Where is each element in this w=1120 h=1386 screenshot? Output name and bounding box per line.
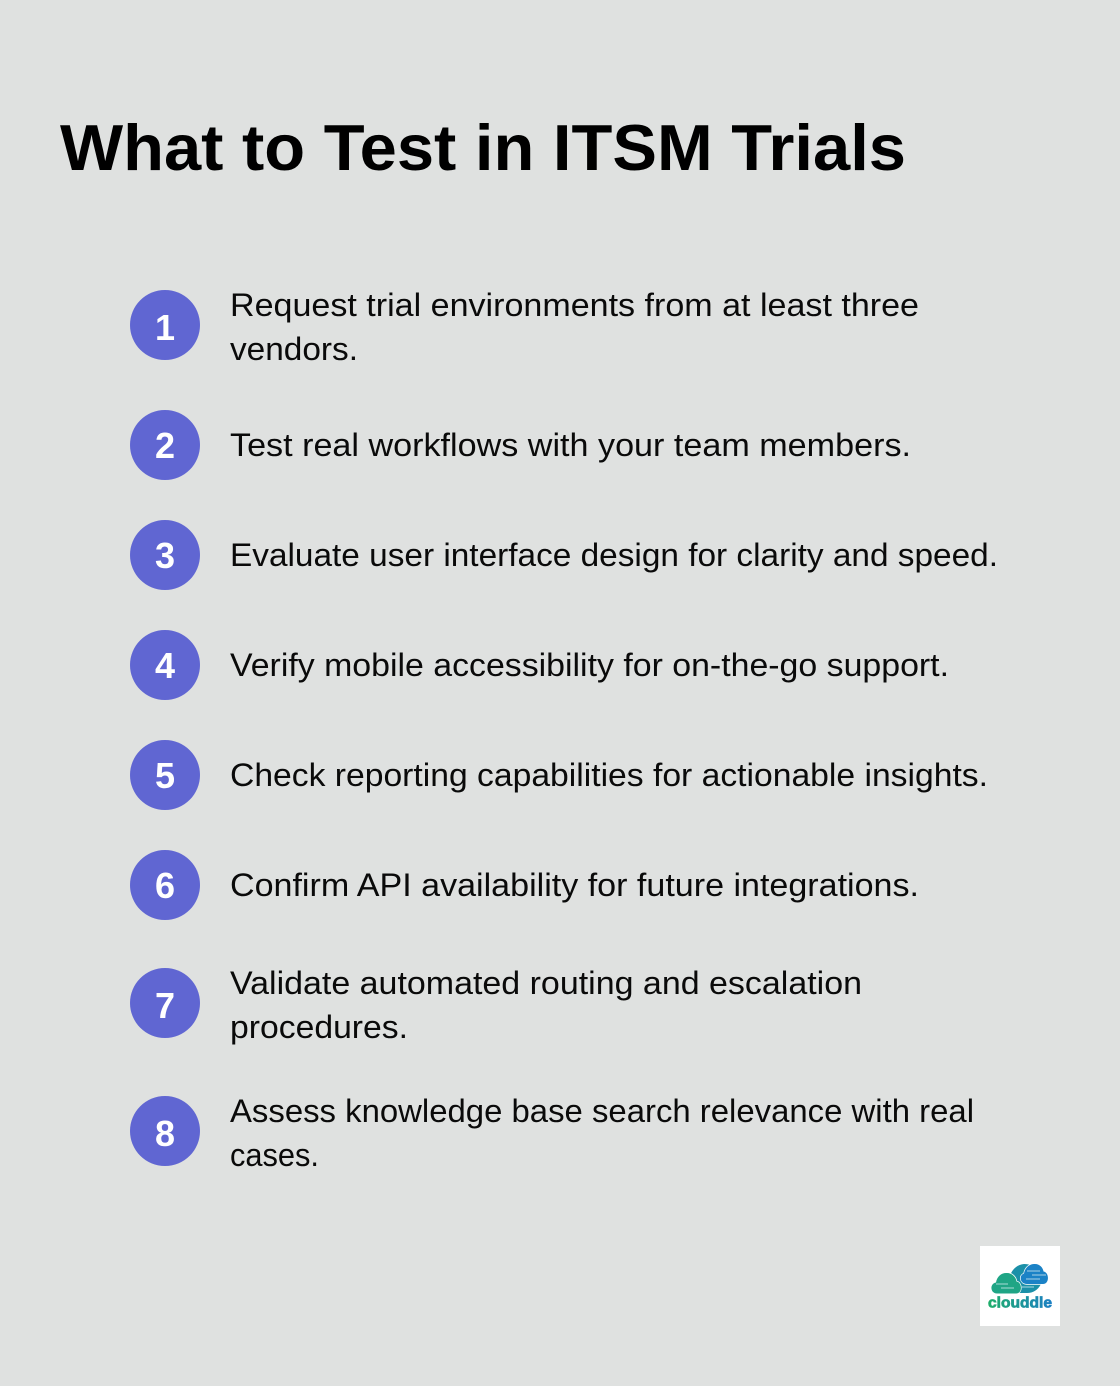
number badge 8: 8 [155, 1113, 175, 1154]
icon: cloud speed lines [996, 1271, 1046, 1288]
number badge 6 [130, 850, 200, 920]
step 3 [130, 520, 998, 590]
step 1 [130, 287, 919, 367]
step 7 text: procedures. [230, 1009, 408, 1045]
number badge 7 [130, 968, 200, 1038]
number badge 6: 6 [155, 865, 175, 906]
step 8 [130, 1093, 974, 1173]
step 2 text: Test real workflows with your team members. [230, 427, 911, 463]
step 1 text [230, 287, 919, 367]
title: What to Test in ITSM Trials [60, 111, 906, 184]
number badge 4: 4 [155, 645, 175, 686]
logo: clouddle [980, 1246, 1060, 1326]
step 4 [130, 630, 949, 700]
step 7 [130, 965, 862, 1045]
step 6 [130, 850, 919, 920]
step 5 text: Check reporting capabilities for actionable insights. [230, 757, 988, 793]
number badge 3 [130, 520, 200, 590]
step 7 text [230, 965, 862, 1045]
number badge 7: 7 [155, 985, 175, 1026]
step 4 text: Verify mobile accessibility for on-the-go support. [230, 647, 949, 683]
number badge 5: 5 [155, 755, 175, 796]
step 2 [130, 410, 911, 480]
step 8 text [230, 1093, 974, 1173]
number badge 2 [130, 410, 200, 480]
icon: left cloud [991, 1273, 1021, 1294]
step 8 text: cases. [230, 1137, 319, 1173]
step 7 text: Validate automated routing and escalation [230, 965, 862, 1001]
number badge 8 [130, 1096, 200, 1166]
number badge 1 [130, 290, 200, 360]
step 5 [130, 740, 988, 810]
step 3 text: Evaluate user interface design for clarity and speed. [230, 537, 998, 573]
step 1 text: vendors. [230, 331, 358, 367]
step 6 text: Confirm API availability for future integrations. [230, 867, 919, 903]
icon: middle cloud [1010, 1264, 1041, 1293]
number badge 1: 1 [155, 307, 175, 348]
number badge 5 [130, 740, 200, 810]
step 1 text: Request trial environments from at least three [230, 287, 919, 323]
number badge 2: 2 [155, 425, 175, 466]
logo wordmark: clouddle [988, 1294, 1052, 1312]
number badge 3: 3 [155, 535, 175, 576]
step 8 text: Assess knowledge base search relevance with real [230, 1093, 974, 1129]
list of steps [130, 287, 998, 1173]
number badge 4 [130, 630, 200, 700]
icon: right cloud [1021, 1264, 1048, 1284]
